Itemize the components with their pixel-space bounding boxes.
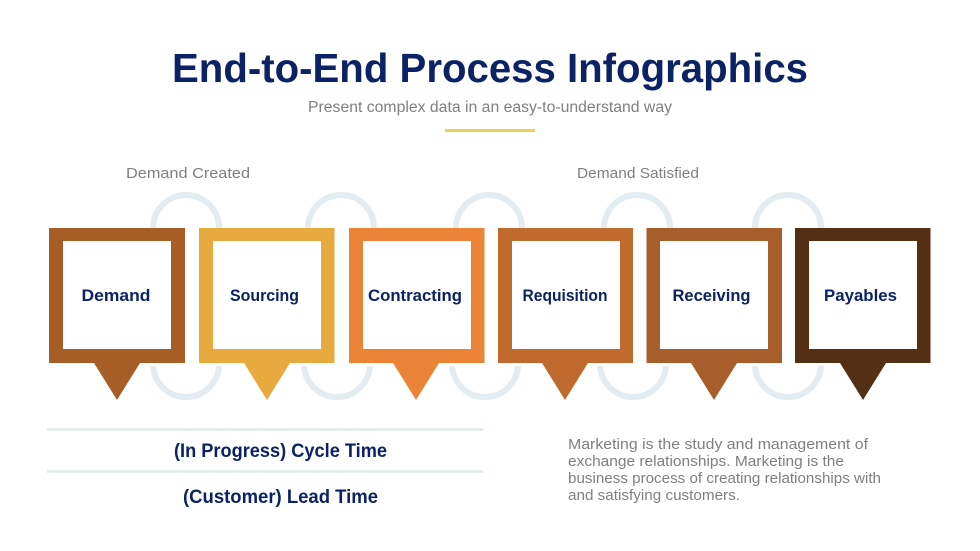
description text: and satisfying customers. (568, 487, 740, 504)
timeline: lead time: (Customer) Lead Time (183, 487, 378, 508)
step: Sourcing (199, 228, 334, 400)
description text: business process of creating relationships with (568, 470, 881, 487)
connector rings (140, 195, 840, 397)
step: Demand: Demand (82, 287, 150, 305)
timeline: lead time (47, 470, 483, 508)
title: End-to-End Process Infographics (172, 45, 808, 91)
step: Payables: Payables (824, 287, 897, 305)
step: Sourcing: Sourcing (230, 287, 299, 305)
step: Contracting: Contracting (368, 287, 462, 305)
step: Requisition: Requisition (522, 287, 608, 305)
step: Contracting (349, 228, 484, 400)
accent underline (445, 129, 535, 132)
timeline: cycle time (47, 428, 483, 462)
label: demand created: Demand Created (126, 165, 250, 182)
step: Receiving: Receiving (672, 287, 750, 305)
step: Requisition (498, 228, 633, 400)
subtitle: Present complex data in an easy-to-understand way (308, 99, 672, 116)
step: Receiving (646, 228, 782, 400)
description text: Marketing is the study and management of (568, 436, 869, 453)
label: demand satisfied: Demand Satisfied (577, 165, 699, 182)
step: Payables (795, 228, 930, 400)
timeline: cycle time: (In Progress) Cycle Time (174, 441, 387, 462)
description text: exchange relationships. Marketing is the (568, 453, 844, 470)
description text (568, 436, 881, 504)
step: Demand (49, 228, 185, 400)
